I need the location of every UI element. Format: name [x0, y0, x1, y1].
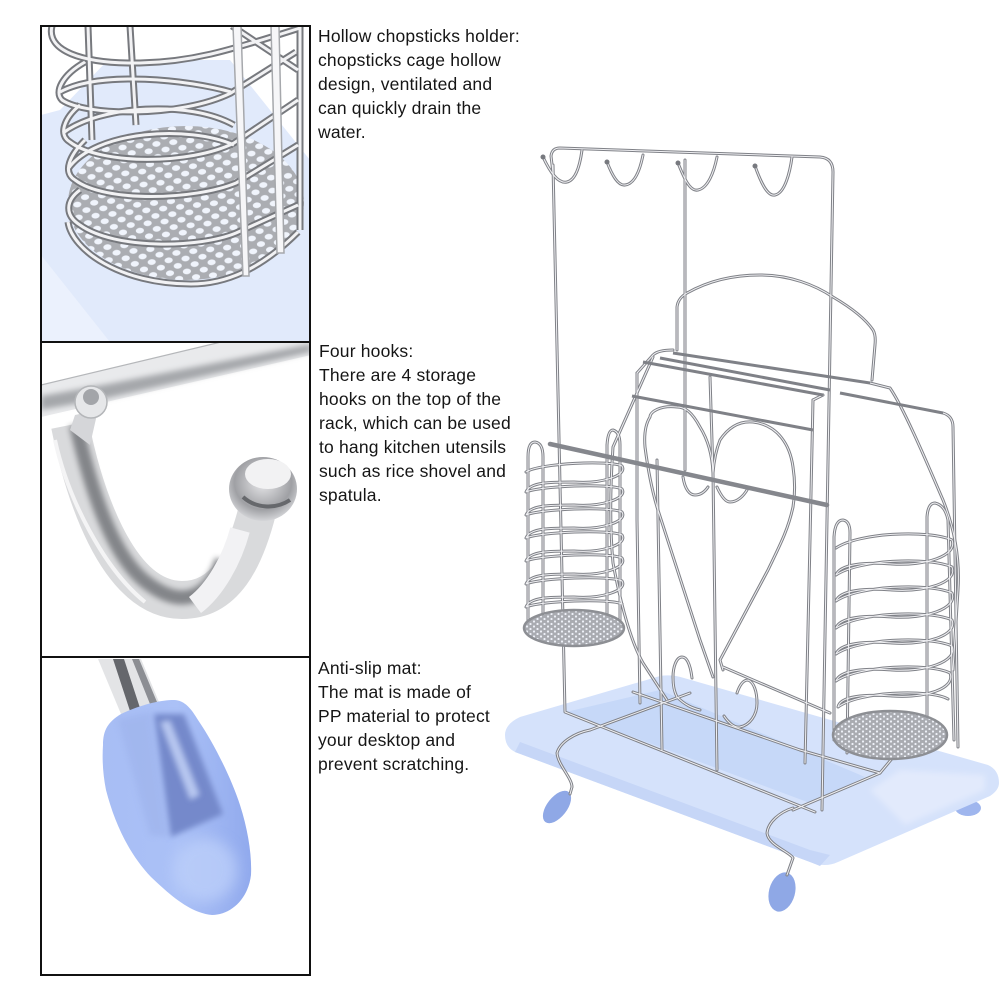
perforated basket floor	[68, 126, 304, 280]
thick cross bar	[550, 444, 827, 505]
blue mat behind basket	[41, 60, 310, 342]
text: four hooks description: spatula.	[319, 485, 382, 505]
text: chopsticks holder description: design, ventilated and	[318, 74, 492, 94]
panel 2 border	[41, 342, 310, 657]
text: anti-slip mat description: your desktop and	[318, 730, 455, 750]
text: four hooks description: hooks on the top of the	[319, 389, 501, 409]
hook ball tips	[540, 154, 758, 168]
tray inner surface	[566, 690, 865, 803]
text: four hooks description: such as rice shovel and	[319, 461, 506, 481]
basket floors	[524, 610, 624, 646]
blue feet behind tray	[955, 800, 981, 816]
text: four hooks description: rack, which can be used	[319, 413, 511, 433]
text: four hooks description: Four hooks:	[319, 341, 413, 361]
panel 3 border	[41, 657, 310, 975]
text: four hooks description: to hang kitchen utensils	[319, 437, 506, 457]
horizontal bar	[41, 342, 311, 417]
text: chopsticks holder description: Hollow chopsticks holder:	[318, 26, 520, 46]
hook ball tip	[229, 457, 297, 521]
panel: chopsticks holder photo	[41, 26, 310, 342]
left foot	[537, 786, 577, 828]
steel rod	[98, 659, 159, 714]
weld bump	[70, 386, 107, 445]
text: four hooks description: There are 4 storage	[319, 365, 476, 385]
vertical posts	[233, 26, 284, 276]
shelf rails	[632, 353, 943, 430]
wire rings	[51, 26, 300, 284]
chrome wires	[526, 148, 958, 875]
panel: foot photo	[98, 659, 252, 915]
text: anti-slip mat description: prevent scratching.	[318, 754, 469, 774]
text: chopsticks holder description: water.	[317, 122, 366, 142]
text: anti-slip mat description: PP material to protect	[318, 706, 490, 726]
text: anti-slip mat description: The mat is made of	[318, 682, 471, 702]
product: kitchen rack on blue tray	[505, 148, 999, 915]
text: chopsticks holder description: chopsticks cage hollow	[318, 50, 501, 70]
rubber foot	[102, 700, 252, 915]
panel 1 border	[41, 26, 310, 342]
right foot	[764, 869, 800, 915]
panel: hook photo	[42, 343, 309, 619]
text: anti-slip mat description: Anti-slip mat:	[318, 658, 422, 678]
hook body	[70, 425, 258, 600]
blue tray	[505, 675, 999, 865]
text: chopsticks holder description: can quickly drain the	[318, 98, 481, 118]
